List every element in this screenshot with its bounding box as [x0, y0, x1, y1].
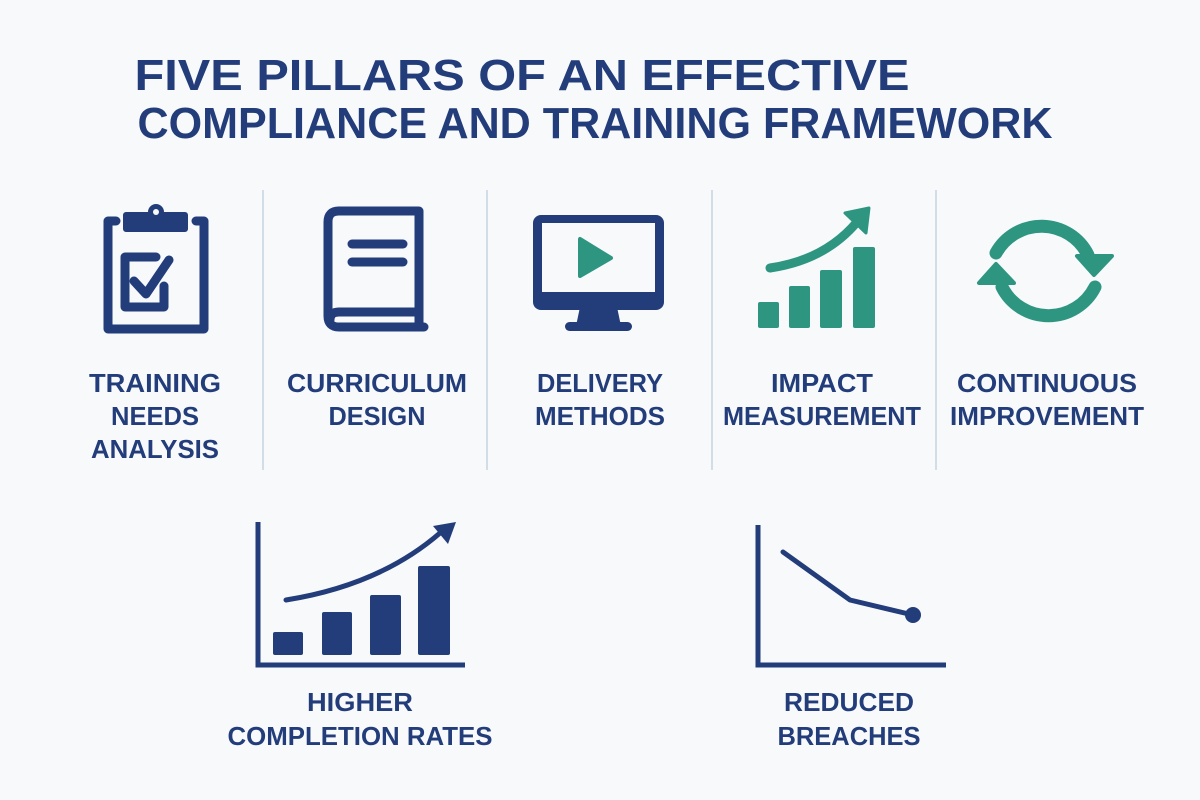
- outcome: higher completion rates: HIGHER: [307, 687, 413, 717]
- pillar 4: impact measurement: MEASUREMENT: [723, 401, 921, 431]
- icon: cycle arrows: [979, 226, 1112, 316]
- icon: book: [328, 211, 424, 327]
- pillar 5: continuous improvement: [950, 226, 1144, 431]
- icon: teal bar chart with arrow: [758, 208, 875, 328]
- chart: rising bars: [258, 522, 465, 665]
- outcome: higher completion rates: COMPLETION RATES: [228, 721, 492, 751]
- title: COMPLIANCE AND TRAINING FRAMEWORK: [138, 99, 1053, 148]
- pillar 3: delivery methods: DELIVERY: [537, 368, 663, 398]
- outcome: reduced breaches: BREACHES: [778, 721, 920, 751]
- outcome: reduced breaches: REDUCED: [784, 687, 914, 717]
- pillar 2: curriculum design: [287, 211, 467, 431]
- pillar 5: continuous improvement: IMPROVEMENT: [950, 401, 1144, 431]
- pillar 4: impact measurement: [723, 208, 921, 431]
- title: FIVE PILLARS OF AN EFFECTIVE: [134, 51, 910, 100]
- outcome: reduced breaches: [758, 525, 946, 751]
- pillar 2: curriculum design: DESIGN: [328, 401, 426, 431]
- pillar 1: training needs analysis: [89, 204, 221, 464]
- title: [134, 51, 1053, 148]
- pillar 1: training needs analysis: NEEDS: [111, 401, 199, 431]
- pillar 3: delivery methods: METHODS: [535, 401, 665, 431]
- icon: monitor with play: [533, 215, 664, 331]
- pillar 3: delivery methods: [533, 215, 665, 431]
- chart: declining line: [758, 525, 946, 665]
- pillar 1: training needs analysis: TRAINING: [89, 368, 221, 398]
- icon: clipboard: [108, 204, 204, 329]
- pillar 4: impact measurement: IMPACT: [771, 368, 873, 398]
- pillar 1: training needs analysis: ANALYSIS: [91, 434, 219, 464]
- pillar 2: curriculum design: CURRICULUM: [287, 368, 467, 398]
- outcome: higher completion rates: [228, 522, 492, 751]
- pillar 5: continuous improvement: CONTINUOUS: [957, 368, 1137, 398]
